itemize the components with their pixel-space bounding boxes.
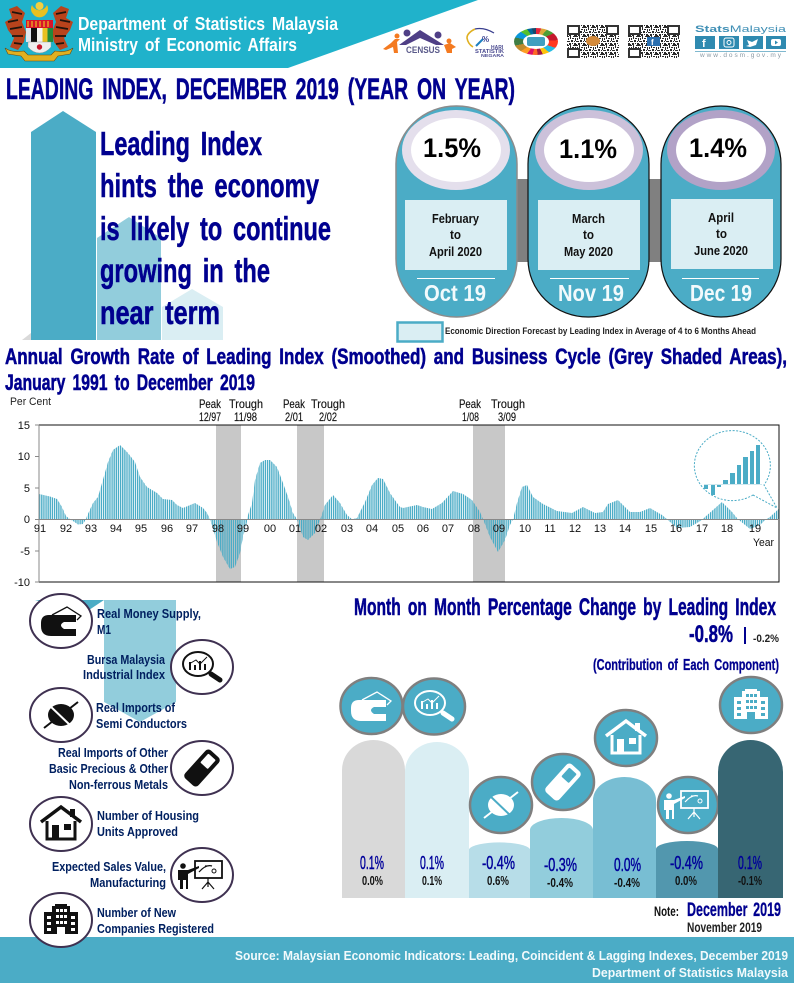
component list [30, 594, 233, 947]
item: expected sales [52, 848, 233, 902]
capsule: Nov 19: March [572, 211, 605, 226]
x axis labels: 13 [594, 523, 606, 535]
bar: precious metals: -0.4% [547, 876, 573, 890]
x axis labels: 12 [569, 523, 581, 535]
capsule: Oct 19 [396, 106, 517, 317]
x axis labels: 03 [341, 523, 353, 535]
capsule legend [398, 322, 756, 342]
capsule: Nov 19: 1.1% [559, 134, 617, 164]
item: semi conductors: Semi Conductors [96, 717, 187, 731]
capsule: Oct 19: 1.5% [423, 133, 481, 163]
x axis labels: 93 [85, 523, 97, 535]
icon: national crest [5, 2, 73, 61]
bar: bursa malaysia: 0.1% [422, 874, 442, 888]
y axis labels: 5 [24, 483, 30, 495]
peak and trough labels: Peak [199, 397, 222, 411]
item: new companies [30, 893, 214, 947]
peak and trough labels: Peak [459, 397, 482, 411]
x axis labels: 91 [34, 523, 46, 535]
x axis labels: 19 [749, 523, 761, 535]
logo: SDG colour wheel [514, 28, 558, 55]
x axis labels: 96 [161, 523, 173, 535]
item: housing units: Units Approved [97, 825, 178, 839]
item: bursa malaysia: Industrial Index [83, 668, 165, 682]
x axis labels: 07 [442, 523, 454, 535]
pentagon background [35, 600, 176, 722]
item: housing units [30, 797, 199, 851]
capsule: Dec 19: Dec 19 [690, 280, 752, 306]
grey business cycle bands [216, 425, 505, 582]
header text: department: Department of Statistics Malaysia [78, 13, 339, 34]
bar: new companies [718, 677, 783, 898]
growth rate bars [39, 445, 778, 569]
x axis labels: 11 [544, 523, 556, 535]
bar: semi conductors [469, 777, 532, 898]
item: expected sales: Expected Sales Value, [52, 860, 166, 874]
item: semi conductors [30, 688, 187, 742]
bar: precious metals: -0.3% [544, 855, 577, 875]
item: real money supply: Real Money Supply, [97, 607, 201, 621]
logo: StatsMalaysia social links: Stats Malaysia [695, 24, 787, 35]
x axis labels: 95 [135, 523, 147, 535]
capsule: Dec 19: June 2020 [694, 243, 748, 258]
logo: StatsMalaysia social links: f [702, 38, 706, 50]
logo: census 2020 [383, 30, 456, 56]
x axis labels: 10 [519, 523, 531, 535]
bar: expected sales [656, 777, 718, 898]
QR code 2: f [651, 38, 654, 47]
peak and trough labels: 3/09 [498, 410, 516, 424]
forecast capsules [396, 106, 781, 317]
headline text [100, 125, 331, 331]
bar: bursa malaysia [403, 678, 469, 898]
x axis labels: 00 [264, 523, 276, 535]
main title: LEADING INDEX, DECEMBER 2019 (YEAR ON YEAR) [6, 73, 515, 106]
capsule: Nov 19: Nov 19 [558, 280, 624, 306]
headline text: growing in the [100, 252, 270, 289]
department text: Department of Statistics Malaysia [592, 965, 789, 980]
y axis labels: 0 [24, 514, 30, 526]
note legend: November 2019 [687, 920, 762, 935]
x axis labels: 16 [670, 523, 682, 535]
capsule: Nov 19 [528, 106, 649, 317]
x axis labels: 08 [468, 523, 480, 535]
peak and trough labels: 2/01 [285, 410, 303, 424]
month on month heading [354, 594, 779, 674]
x axis labels: 98 [212, 523, 224, 535]
growth arrows graphic [22, 111, 223, 340]
bar: real money supply: 0.0% [362, 874, 383, 888]
bar chart: contribution of each component [340, 677, 783, 898]
QR code 2 [628, 25, 680, 58]
capsule: Oct 19: to [450, 227, 461, 242]
logo: StatsMalaysia social links [695, 24, 787, 59]
item: new companies: Number of New [97, 906, 176, 920]
chart: leading index growth and business cycle [10, 396, 779, 589]
logo: hari statistik negara: STATISTIK [475, 49, 504, 55]
y axis labels: -5 [20, 546, 30, 558]
x axis labels: 09 [493, 523, 505, 535]
item: precious metals: Non-ferrous Metals [69, 778, 168, 792]
logo: hari statistik negara: % [482, 35, 489, 44]
headline text: Leading Index [100, 125, 262, 162]
capsule: Dec 19: 1.4% [689, 133, 747, 163]
y axis labels: 10 [18, 451, 30, 463]
x axis labels: 04 [366, 523, 378, 535]
logo: StatsMalaysia social links: www.dosm.gov.my [699, 52, 782, 59]
bar: housing units: -0.4% [614, 876, 640, 890]
header banner [0, 0, 478, 68]
QR code 1 [567, 25, 619, 58]
x axis labels: 92 [60, 523, 72, 535]
item: housing units: Number of Housing [97, 809, 199, 823]
item: bursa malaysia [83, 640, 233, 694]
bar: real money supply: 0.1% [360, 853, 384, 873]
bar: bursa malaysia: 0.1% [420, 853, 444, 873]
axes [39, 425, 779, 582]
capsule: Oct 19: Oct 19 [424, 280, 486, 306]
x axis labels: 94 [110, 523, 122, 535]
bar: housing units [593, 710, 657, 898]
item: precious metals: Basic Precious & Other [49, 762, 168, 776]
chart title: January 1991 to December 2019 [5, 370, 255, 395]
x axis labels: 05 [392, 523, 404, 535]
logo: census 2020: CENSUS [406, 45, 440, 56]
x axis labels: 18 [721, 523, 733, 535]
bar: housing units: 0.0% [614, 855, 641, 875]
peak and trough labels [199, 397, 525, 424]
logo: hari statistik negara [467, 28, 505, 58]
x axis labels: 17 [696, 523, 708, 535]
x axis title: Year [753, 537, 774, 549]
peak and trough labels: Trough [491, 397, 525, 411]
item: precious metals: Real Imports of Other [58, 746, 168, 760]
header text: ministry: Ministry of Economic Affairs [78, 34, 297, 55]
item: precious metals [49, 741, 233, 795]
peak and trough labels: 12/97 [199, 410, 221, 424]
month on month heading: -0.8% [689, 621, 733, 648]
peak and trough labels: 2/02 [319, 410, 337, 424]
item: semi conductors: Real Imports of [96, 701, 176, 715]
chart title [5, 344, 787, 395]
capsule: Oct 19: February [432, 211, 480, 226]
logo: hari statistik negara: HARI [491, 45, 504, 51]
bar: real money supply [340, 678, 405, 898]
x axis labels: 97 [186, 523, 198, 535]
note legend [654, 900, 781, 935]
peak and trough labels: 11/98 [234, 410, 257, 424]
x axis labels: 01 [289, 523, 301, 535]
item: real money supply [30, 594, 201, 648]
bar: new companies: -0.1% [738, 874, 762, 888]
headline text: hints the economy [100, 167, 319, 204]
logo: hari statistik negara: NEGARA [481, 53, 505, 58]
y axis labels: 15 [18, 420, 30, 432]
peak and trough labels: 1/08 [462, 410, 479, 424]
capsule: Nov 19: May 2020 [564, 244, 613, 259]
month on month heading: -0.2% [753, 633, 779, 645]
x axis labels: 06 [417, 523, 429, 535]
peak and trough labels: Trough [229, 397, 263, 411]
capsule: Dec 19 [661, 106, 781, 317]
x axis labels: 99 [237, 523, 249, 535]
bar: expected sales: 0.0% [675, 874, 697, 888]
item: new companies: Companies Registered [97, 922, 214, 936]
x axis labels: 14 [619, 523, 631, 535]
capsule: Oct 19: April 2020 [429, 244, 482, 259]
bar: expected sales: -0.4% [670, 853, 703, 873]
y axis labels: -10 [14, 577, 30, 589]
headline text: near term [100, 294, 220, 331]
capsule: Nov 19: to [583, 227, 594, 242]
bar: semi conductors: 0.6% [487, 874, 509, 888]
callout: recent months zoom [694, 431, 777, 508]
bar: semi conductors: -0.4% [482, 853, 515, 873]
item: expected sales: Manufacturing [90, 876, 166, 890]
item: bursa malaysia: Bursa Malaysia [87, 653, 166, 667]
x axis labels: 02 [315, 523, 327, 535]
peak and trough labels: Peak [283, 397, 306, 411]
headline text: is likely to continue [100, 210, 331, 247]
capsule: Dec 19: April [708, 210, 734, 225]
x axis labels: 15 [645, 523, 657, 535]
bar: precious metals [530, 754, 594, 898]
capsule: Dec 19: to [716, 226, 727, 241]
peak and trough labels: Trough [311, 397, 345, 411]
item: real money supply: M1 [97, 623, 111, 637]
x axis labels [34, 523, 761, 535]
note legend: Note: [654, 903, 679, 919]
y axis labels [14, 420, 30, 589]
footer band [0, 937, 794, 983]
bar: new companies: 0.1% [738, 853, 762, 873]
y axis title: Per Cent [10, 396, 51, 408]
